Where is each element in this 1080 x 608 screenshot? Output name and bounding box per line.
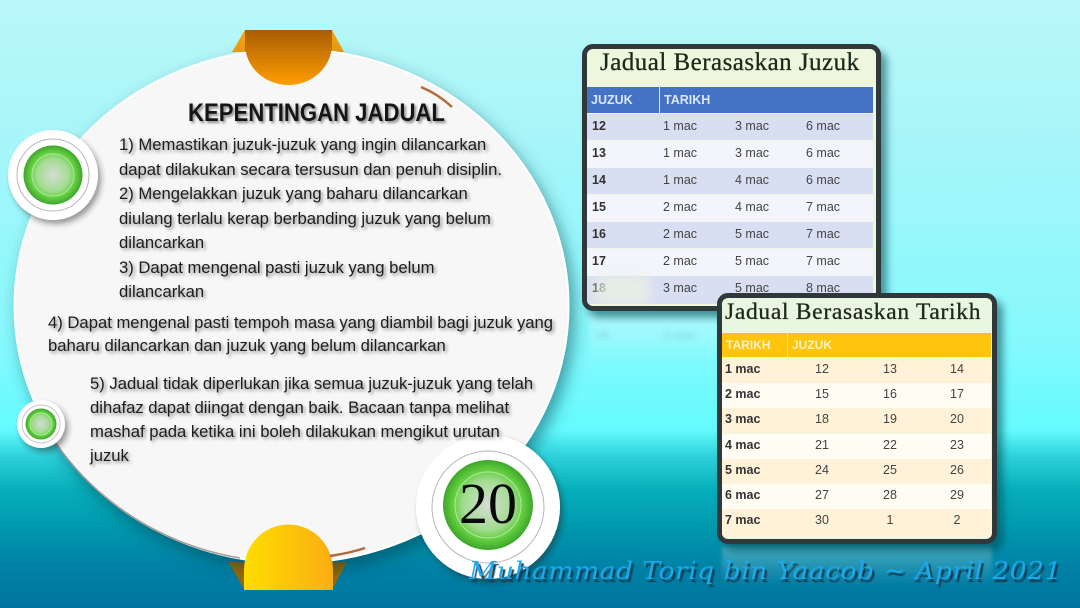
text block: points: 2) Mengelakkan juzuk yang baharu dilancarkan (119, 184, 468, 203)
table rows: 29 (950, 488, 964, 502)
table card: Jadual Berasaskan Juzuk (582, 44, 881, 311)
orange semicircle (245, 30, 332, 85)
table rows: 1 mac (663, 173, 697, 187)
table rows: 6 mac (806, 119, 840, 133)
table rows: 14 (592, 173, 606, 187)
table rows: 7 mac (806, 200, 840, 214)
accent stroke top right (421, 87, 452, 107)
table rows: 2 mac (663, 254, 697, 268)
table rows: 4 mac (725, 438, 760, 452)
table rows: 21 (815, 438, 829, 452)
table header: JUZUK (792, 338, 832, 352)
table rows: 18 (815, 412, 829, 426)
table rows: 19 (883, 412, 897, 426)
green number button (416, 435, 560, 579)
table rows: 1 mac (663, 119, 697, 133)
text block: points: dilancarkan (119, 282, 204, 301)
table header (587, 87, 873, 113)
reflection of juzuk table (590, 314, 720, 364)
table rows: 8 mac (806, 281, 840, 295)
text block: points: baharu dilancarkan dan juzuk yang belum dilancarkan (48, 336, 446, 355)
text block: points (48, 135, 556, 468)
green button small (17, 400, 65, 448)
table rows: 7 mac (806, 254, 840, 268)
table rows (722, 358, 991, 537)
table header: JUZUK (591, 93, 633, 107)
table rows: 25 (883, 463, 897, 477)
table rows: 5 mac (735, 254, 769, 268)
table rows: 7 mac (725, 513, 760, 527)
text block: points: 3) Dapat mengenal pasti juzuk yang belum (119, 258, 434, 277)
reflection of juzuk table: 18 (595, 328, 608, 342)
table rows: 5 mac (735, 281, 769, 295)
table rows: 24 (815, 463, 829, 477)
table rows: 30 (815, 513, 829, 527)
table rows: 2 mac (663, 200, 697, 214)
table rows: 6 mac (725, 488, 760, 502)
text block: points: dihafaz dapat diingat dengan baik. Bacaan tanpa melihat (90, 398, 509, 417)
table rows: 28 (883, 488, 897, 502)
table rows: 26 (950, 463, 964, 477)
text block: points: juzuk (90, 446, 129, 465)
table rows: 13 (592, 146, 606, 160)
table rows: 2 (954, 513, 960, 527)
table rows: 5 mac (725, 463, 760, 477)
table reflection (722, 546, 992, 586)
table rows: 14 (950, 362, 964, 376)
text block: points: diulang terlalu kerap berbanding juzuk yang belum (119, 209, 491, 228)
table rows: 4 mac (735, 200, 769, 214)
text block: points: mashaf pada ketika ini boleh dilakukan mengikut urutan (90, 422, 500, 441)
accent stroke bottom (330, 548, 365, 556)
text block: points: dapat dilakukan secara tersusun dan penuh disiplin. (119, 160, 502, 179)
table rows: 3 mac (725, 412, 760, 426)
table card: Jadual Berasaskan Tarikh (717, 293, 997, 544)
table rows (587, 114, 873, 304)
table rows: 17 (950, 387, 964, 401)
author credit: Muhammad Toriq bin Yaacob ~ April 2021 (469, 557, 1062, 585)
table rows: 17 (592, 254, 606, 268)
table rows: 1 mac (725, 362, 760, 376)
table rows: 20 (950, 412, 964, 426)
table rows: 5 mac (735, 227, 769, 241)
table rows: 2 mac (725, 387, 760, 401)
table rows: 12 (815, 362, 829, 376)
circle (14, 49, 568, 563)
table rows: 27 (815, 488, 829, 502)
table rows: 23 (950, 438, 964, 452)
table rows: 18 (592, 281, 606, 295)
table rows: 3 mac (735, 119, 769, 133)
reflection of juzuk table: 3 mac (663, 328, 696, 342)
blurred smudge lower left (595, 276, 650, 304)
text block: points: 1) Memastikan juzuk-juzuk yang ingin dilancarkan (119, 135, 486, 154)
table rows: 16 (592, 227, 606, 241)
yellow semicircle (244, 524, 333, 590)
heading: KEPENTINGAN JADUAL (188, 99, 445, 127)
yellow bottom tab wings (228, 562, 347, 590)
table rows: 16 (883, 387, 897, 401)
table header: TARIKH (664, 93, 710, 107)
table rows: 15 (592, 200, 606, 214)
table rows: 1 (887, 513, 893, 527)
table rows: 6 mac (806, 173, 840, 187)
table rows: 12 (592, 119, 606, 133)
table header (722, 333, 991, 357)
number 20: 20 (459, 471, 517, 536)
table rows: 3 mac (735, 146, 769, 160)
table rows: 3 mac (663, 281, 697, 295)
table rows: 13 (883, 362, 897, 376)
orange top tab (232, 30, 344, 60)
table header: TARIKH (726, 338, 770, 352)
table rows: 15 (815, 387, 829, 401)
text block: points: 4) Dapat mengenal pasti tempoh masa yang diambil bagi juzuk yang (48, 313, 553, 332)
green button large (8, 130, 98, 220)
text block: points: dilancarkan (119, 233, 204, 252)
table rows: 22 (883, 438, 897, 452)
main circle panel (7, 30, 586, 590)
table rows: 6 mac (806, 146, 840, 160)
table rows: 2 mac (663, 227, 697, 241)
table title: Jadual Berasaskan Tarikh (725, 299, 981, 325)
text block: points: 5) Jadual tidak diperlukan jika semua juzuk-juzuk yang telah (90, 374, 533, 393)
table title: Jadual Berasaskan Juzuk (600, 49, 860, 76)
table rows: 7 mac (806, 227, 840, 241)
table rows: 1 mac (663, 146, 697, 160)
table rows: 4 mac (735, 173, 769, 187)
